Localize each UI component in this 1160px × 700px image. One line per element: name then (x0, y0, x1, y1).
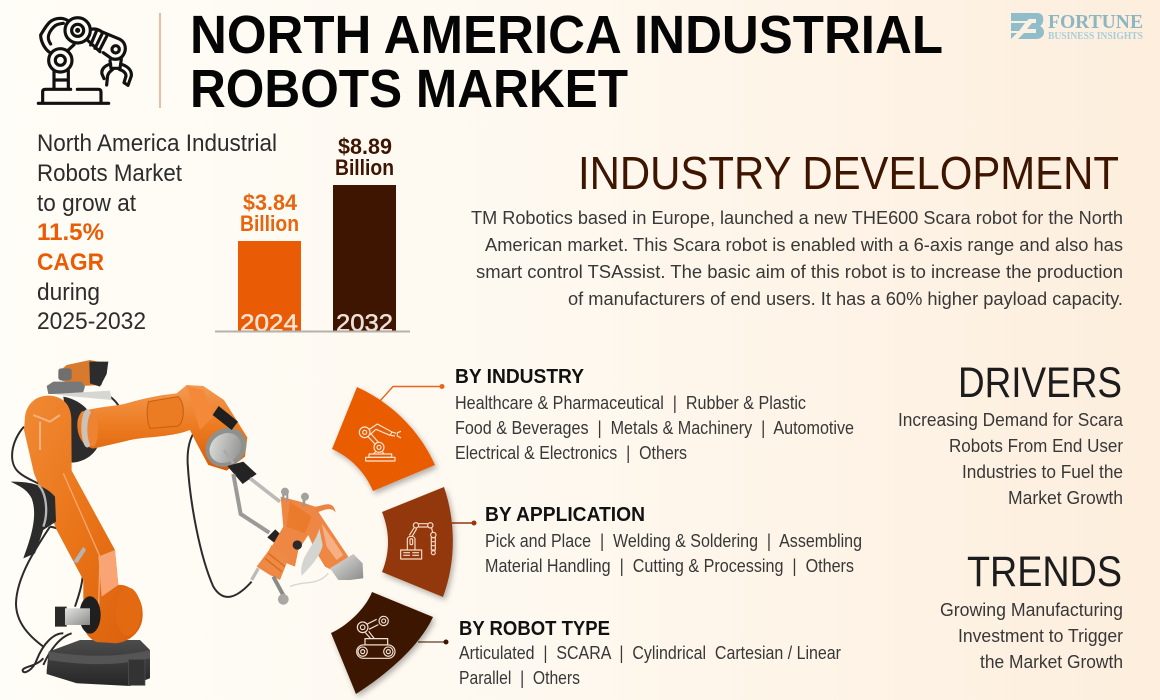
logo: Fortune Business Insights (1011, 12, 1143, 42)
text block: by application: BY APPLICATION (485, 504, 645, 526)
text block: CAGR statement: North America Industrial (37, 130, 277, 157)
text block: by industry: Electrical & Electronics | Others (455, 443, 687, 463)
rear guard (11, 482, 56, 558)
bar chart (215, 134, 410, 337)
text block: drivers: Industries to Fuel the (962, 462, 1123, 482)
divider (159, 13, 161, 108)
text block: by industry: Food & Beverages | Metals & Machinery | Automotive (455, 418, 854, 438)
robot base (47, 640, 150, 686)
text block: CAGR statement: 2025-2032 (37, 308, 146, 335)
text block: CAGR statement: to grow at (37, 190, 136, 217)
text block: industry development: American market. This Scara robot is enabled with a 6-axis range and also has (485, 235, 1123, 255)
text block: by industry: Healthcare & Pharmaceutical | Rubber & Plastic (455, 393, 806, 413)
connector line (418, 640, 448, 644)
bar 2032: $8.89 (338, 134, 392, 159)
text block: drivers: Market Growth (1008, 488, 1123, 508)
text block: by industry (455, 366, 854, 463)
logo mark (1011, 13, 1044, 39)
segment: by robot type (331, 592, 448, 694)
connector line (380, 384, 444, 401)
heading: industry development: INDUSTRY DEVELOPMENT (578, 147, 1119, 199)
text block: industry development: of manufacturers of end users. It has a 60% higher payload capacity. (568, 289, 1123, 309)
spray gun (252, 488, 363, 605)
text block: by application: Material Handling | Cutting & Processing | Others (485, 556, 854, 576)
text block: trends: Investment to Trigger (958, 626, 1123, 646)
cable clamp (213, 406, 238, 430)
segment: by application (382, 487, 476, 597)
text block: drivers: Increasing Demand for Scara (898, 410, 1124, 430)
heading: trends: TRENDS (967, 548, 1122, 596)
text block: industry development: TM Robotics based in Europe, launched a new THE600 Scara robot for the North (471, 208, 1123, 228)
top sensor unit (47, 360, 112, 400)
main lower arm (24, 396, 143, 643)
bar 2032: Billion (335, 155, 394, 180)
text block: CAGR statement (37, 130, 277, 335)
title (190, 5, 943, 119)
heading: drivers: DRIVERS (958, 359, 1122, 407)
bar 2024: Billion (240, 211, 299, 236)
wedge (382, 487, 453, 597)
text block: by robot type: Parallel | Others (459, 668, 580, 688)
text block: by application (485, 504, 862, 576)
icon: tracked robot (357, 616, 395, 658)
text block: CAGR statement: 11.5% (37, 219, 104, 246)
text block: industry development: smart control TSAssist. The basic aim of this robot is to increase the production (476, 262, 1123, 282)
logo: Fortune Business Insights: BUSINESS INSIGHTS (1048, 31, 1143, 42)
text block: CAGR statement: during (37, 279, 100, 306)
text block: trends (940, 600, 1123, 672)
text block: industry development (471, 208, 1123, 309)
title: ROBOTS MARKET (190, 59, 628, 119)
shoulder shadow (63, 397, 99, 463)
icon: robot arm wrench (359, 424, 401, 461)
gripper (227, 462, 290, 551)
segment: by industry (332, 384, 444, 491)
bar 2024: $3.84 (243, 190, 298, 215)
wedge (332, 387, 435, 491)
icon: robot arm header (38, 18, 131, 103)
text block: CAGR statement: CAGR (37, 249, 104, 276)
text block: by robot type: Articulated | SCARA | Cylindrical Cartesian / Linear (459, 643, 841, 663)
connector line (452, 520, 476, 526)
bar 2024 (238, 190, 301, 337)
icon: gantry robot (401, 523, 436, 559)
logo: Fortune Business Insights: FORTUNE (1048, 12, 1143, 33)
text block: by robot type (459, 618, 841, 688)
bar 2032: 2032 (336, 310, 393, 337)
bar 2032 (333, 134, 396, 337)
text block: drivers: Robots From End User (949, 436, 1123, 456)
text block: drivers (898, 410, 1124, 508)
robot arm illustration (11, 360, 363, 686)
text block: trends: Growing Manufacturing (940, 600, 1123, 620)
cables (12, 397, 252, 672)
bar 2024: 2024 (240, 310, 298, 337)
title: NORTH AMERICA INDUSTRIAL (190, 5, 943, 65)
motor (55, 607, 90, 627)
text block: trends: the Market Growth (980, 652, 1123, 672)
upper arm (77, 385, 247, 471)
text block: CAGR statement: Robots Market (37, 160, 182, 187)
wedge (331, 592, 433, 694)
text block: by industry: BY INDUSTRY (455, 366, 585, 388)
arm end flange (198, 420, 254, 475)
text block: by robot type: BY ROBOT TYPE (459, 618, 610, 640)
text block: by application: Pick and Place | Welding & Soldering | Assembling (485, 531, 862, 551)
